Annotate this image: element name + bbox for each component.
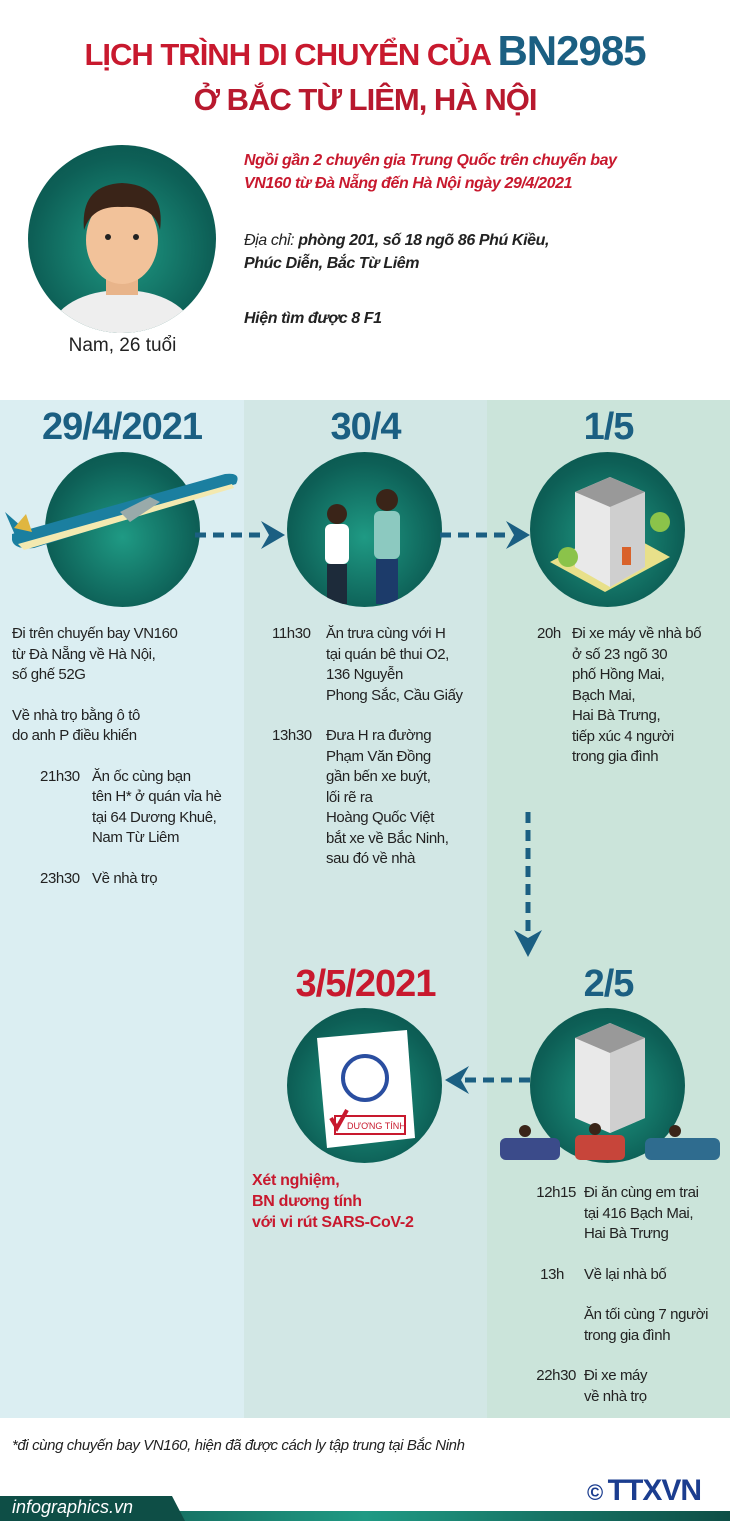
text: 2/5: trong gia đình <box>584 1326 670 1344</box>
icon: positive test <box>287 1008 442 1163</box>
text: 29/4: Nam Từ Liêm <box>92 829 179 846</box>
date 2/5: 2/5 <box>584 963 633 1005</box>
title: Ở BẮC TỪ LIÊM, HÀ NỘI <box>194 82 536 117</box>
icon: building <box>530 452 685 607</box>
text: 2/5: Hai Bà Trưng <box>584 1225 668 1242</box>
patient label: Nam, 26 tuổi <box>69 335 176 356</box>
text: 30/4: Hoàng Quốc Việt <box>326 809 434 826</box>
text: 29/4: do anh P điều khiển <box>12 727 137 744</box>
text: 30/4: gần bến xe buýt, <box>326 768 431 785</box>
text: 1/5: Hai Bà Trưng, <box>572 707 660 724</box>
icon: positive test: DƯƠNG TÍNH <box>347 1121 406 1131</box>
text: 2/5: 12h15 <box>536 1184 576 1201</box>
text: 3/5 result: BN dương tính <box>252 1193 362 1210</box>
text: 29/4: từ Đà Nẵng về Hà Nội, <box>12 646 155 662</box>
title: LỊCH TRÌNH DI CHUYỂN CỦA BN2985 <box>84 27 646 74</box>
date 29/4/2021: 29/4/2021 <box>42 406 202 448</box>
text: 30/4: Phạm Văn Đồng <box>326 748 431 764</box>
patient info: Địa chỉ: phòng 201, số 18 ngõ 86 Phú Kiều, <box>244 232 549 249</box>
text: 1/5: Bạch Mai, <box>572 686 635 704</box>
text: 30/4: 11h30 <box>272 625 311 642</box>
arrow left <box>445 1066 530 1094</box>
text: 30/4: bắt xe về Bắc Ninh, <box>326 830 448 846</box>
text: 2/5: Về lại nhà bố <box>584 1266 666 1282</box>
text: 29/4: tại 64 Dương Khuê, <box>92 808 216 826</box>
text: 2/5: 13h <box>540 1266 564 1282</box>
text: 1/5: Đi xe máy về nhà bố <box>572 625 701 642</box>
arrow 1 <box>195 521 285 549</box>
footer bar <box>0 1496 730 1521</box>
text: 29/4: Về nhà trọ bằng ô tô <box>12 706 140 724</box>
footer bar: infographics.vn <box>12 1497 133 1517</box>
date 3/5/2021: 3/5/2021 <box>296 963 435 1005</box>
text: 2/5: tại 416 Bạch Mai, <box>584 1204 693 1222</box>
logo: TTXVN: © TTXVN <box>587 1474 701 1507</box>
text: 30/4: lối rẽ ra <box>326 788 372 806</box>
text: 1/5: 20h <box>537 625 561 642</box>
text: 30/4: 13h30 <box>272 727 312 744</box>
text: 30/4: Phong Sắc, Cầu Giấy <box>326 686 463 704</box>
patient info <box>244 152 618 327</box>
text: 3/5 result: với vi rút SARS-CoV-2 <box>252 1214 414 1231</box>
text: 2/5: Đi xe máy <box>584 1367 647 1384</box>
text: 2/5: 22h30 <box>536 1367 576 1384</box>
text: 29/4: tên H* ở quán vỉa hè <box>92 788 221 805</box>
text: 30/4: sau đó về nhà <box>326 850 415 867</box>
column backgrounds <box>0 400 730 1418</box>
text: 30/4: Đưa H ra đường <box>326 727 431 744</box>
text: 29/4: Về nhà trọ <box>92 870 157 886</box>
title <box>84 27 646 117</box>
text: 30/4 <box>272 625 463 867</box>
date 30/4: 30/4 <box>331 406 400 448</box>
text: 1/5: phố Hồng Mai, <box>572 666 664 683</box>
icon: two people <box>287 452 442 607</box>
text: 3/5 result <box>252 1172 414 1231</box>
patient info: VN160 từ Đà Nẵng đến Hà Nội ngày 29/4/2021 <box>244 175 572 192</box>
text: 1/5: ở số 23 ngõ 30 <box>572 646 667 662</box>
footnote: *đi cùng chuyến bay VN160, hiện đã được cách ly tập trung tại Bắc Ninh <box>12 1437 465 1454</box>
patient info: Phúc Diễn, Bắc Từ Liêm <box>244 255 419 272</box>
text: 2/5: Đi ăn cùng em trai <box>584 1184 699 1201</box>
text: 2/5: về nhà trọ <box>584 1388 647 1404</box>
text: 29/4: 21h30 <box>40 768 80 784</box>
text: 29/4: Đi trên chuyến bay VN160 <box>12 625 178 642</box>
text: 30/4: tại quán bê thui O2, <box>326 646 449 662</box>
text: 2/5 <box>536 1184 708 1404</box>
text: 2/5: Ăn tối cùng 7 người <box>584 1306 708 1323</box>
text: 3/5 result: Xét nghiệm, <box>252 1172 339 1189</box>
text: 1/5 <box>537 625 702 765</box>
text: 1/5: tiếp xúc 4 người <box>572 728 674 744</box>
text: 30/4: 136 Nguyễn <box>326 666 403 683</box>
arrow down <box>514 812 542 957</box>
text: 30/4: Ăn trưa cùng với H <box>326 625 445 642</box>
text: 29/4: Ăn ốc cùng bạn <box>92 768 191 784</box>
arrow 2 <box>440 521 530 549</box>
patient info: Hiện tìm được 8 F1 <box>244 310 382 327</box>
text: 29/4 <box>12 625 222 886</box>
text: 1/5: trong gia đình <box>572 748 658 765</box>
patient avatar <box>28 145 216 333</box>
icon: plane <box>5 452 238 607</box>
patient info: Ngồi gần 2 chuyên gia Trung Quốc trên chuyến bay <box>244 152 617 169</box>
icon: building with family <box>500 1008 720 1163</box>
text: 29/4: số ghế 52G <box>12 666 86 683</box>
text: 29/4: 23h30 <box>40 870 80 886</box>
date 1/5: 1/5 <box>584 406 633 448</box>
